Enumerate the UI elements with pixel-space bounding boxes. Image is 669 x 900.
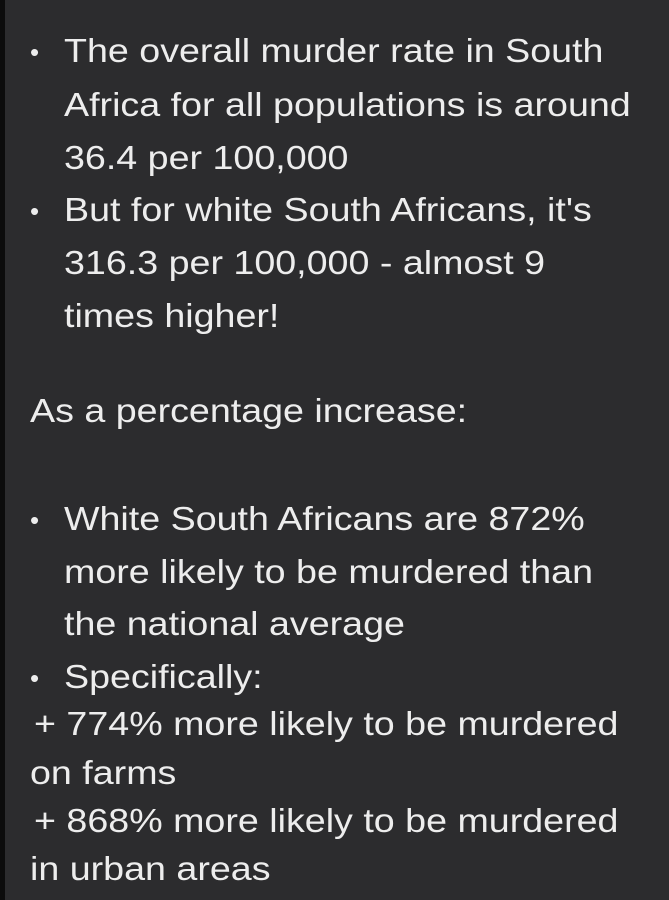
text block: white South Africans bullet: times higher!: [64, 297, 279, 334]
text: 36.4 per 100,000: [64, 139, 348, 176]
text block: specifically: [30, 658, 618, 887]
text block: overall murder rate bullet: The overall murder rate in South: [64, 32, 603, 69]
text block: specifically: + 774% more likely to be murdered: [34, 705, 618, 742]
text block: overall murder rate bullet: Africa for all populations is around: [64, 86, 631, 123]
bullet dot: •: [30, 37, 39, 67]
heading: percentage increase: As a percentage increase:: [30, 392, 467, 429]
text block: 872% bullet: more likely to be murdered than: [64, 553, 593, 590]
text block: specifically: in urban areas: [30, 850, 271, 887]
text block: overall murder rate bullet: [30, 32, 631, 123]
text block: specifically: Specifically:: [64, 658, 263, 695]
text block: 872% bullet: White South Africans are 872%: [64, 500, 585, 537]
text block: 872% bullet: •: [30, 505, 39, 535]
text block: 872% bullet: [30, 500, 593, 642]
text block: white South Africans bullet: [30, 191, 592, 334]
text block: white South Africans bullet: •: [30, 196, 39, 226]
text block: 872% bullet: the national average: [64, 605, 405, 642]
text block: specifically: + 868% more likely to be murdered: [34, 802, 618, 839]
text block: specifically: on farms: [30, 754, 176, 791]
text block: white South Africans bullet: But for white South Africans, it's: [64, 191, 592, 228]
text block: white South Africans bullet: 316.3 per 100,000 - almost 9: [64, 244, 545, 281]
text block: specifically: •: [30, 663, 39, 693]
